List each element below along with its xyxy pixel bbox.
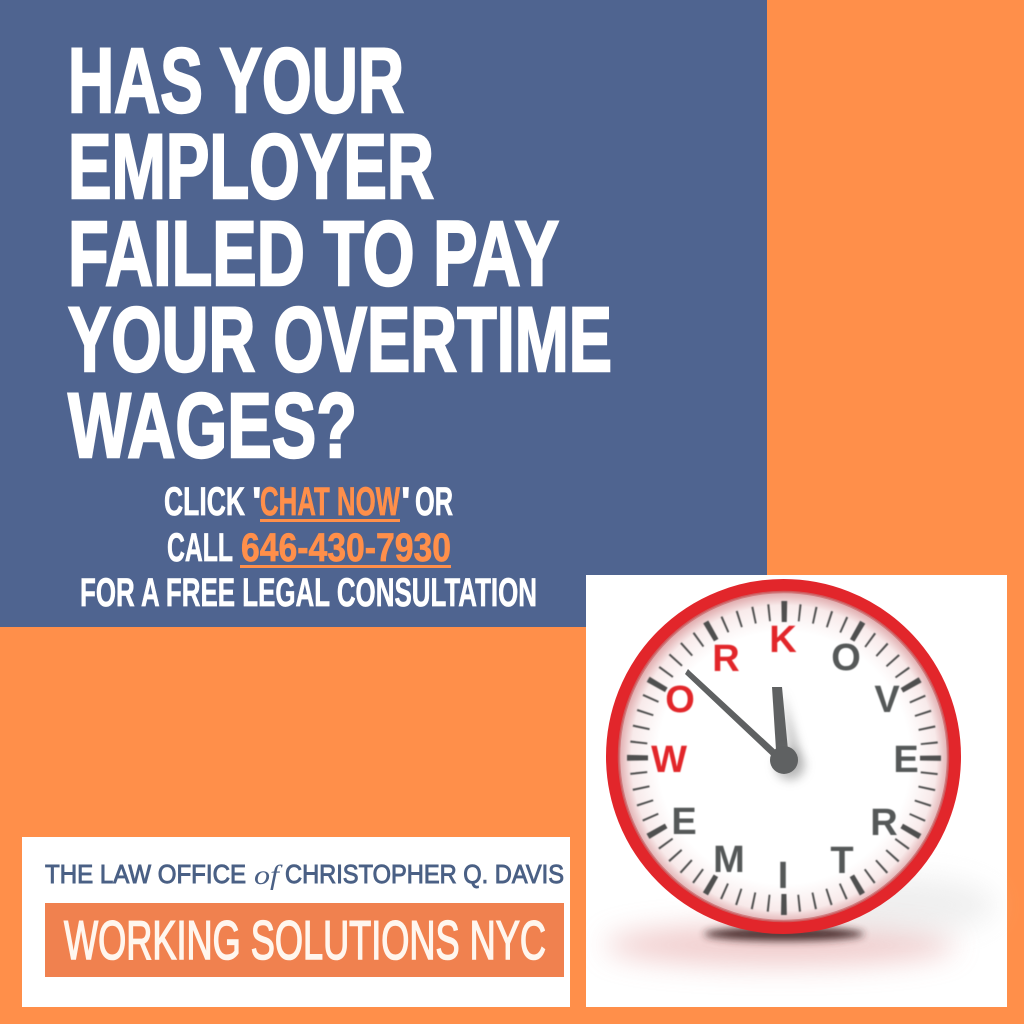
clock floor shadow xyxy=(605,877,995,965)
title: HAS YOUR xyxy=(68,30,404,132)
panel: clock image xyxy=(586,575,1007,1007)
call to action text: CHAT NOW xyxy=(260,480,400,524)
firm name: CHRISTOPHER Q. DAVIS xyxy=(285,861,564,889)
clock letters: work overtime: M xyxy=(713,839,745,881)
panel: law office logo xyxy=(22,837,570,1007)
clock letters: work overtime: R xyxy=(870,802,898,844)
clock tick marks xyxy=(638,612,930,904)
clock letters: work overtime: I xyxy=(778,855,788,897)
call to action text: CLICK xyxy=(164,480,245,524)
clock letters: work overtime: R xyxy=(712,638,740,680)
clock letters: work overtime: E xyxy=(671,801,697,843)
clock rim xyxy=(612,586,954,928)
orange banner xyxy=(45,903,564,977)
firm name: THE LAW OFFICE xyxy=(45,861,246,889)
title: EMPLOYER xyxy=(68,116,434,218)
title: YOUR OVERTIME xyxy=(68,289,612,391)
clock letters: work overtime: K xyxy=(769,619,797,661)
call to action text: OR xyxy=(415,480,453,524)
clock hands xyxy=(685,669,805,780)
clock letters: work overtime: T xyxy=(830,840,854,882)
call to action text: ' xyxy=(401,480,411,524)
clock letters: work overtime: O xyxy=(831,637,861,679)
call to action text: FOR A FREE LEGAL CONSULTATION xyxy=(80,571,537,615)
call to action text: CALL xyxy=(167,526,233,570)
title xyxy=(68,30,612,477)
firm name xyxy=(45,860,564,890)
call to action text: ' xyxy=(252,480,262,524)
title: WAGES? xyxy=(68,375,357,477)
call to action text xyxy=(80,480,537,615)
clock letters: work overtime: V xyxy=(874,679,900,721)
clock letters: work overtime: E xyxy=(893,739,919,781)
panel: blue headline block xyxy=(0,0,767,627)
title: FAILED TO PAY xyxy=(68,203,559,305)
orange banner: WORKING SOLUTIONS NYC xyxy=(64,909,546,971)
clock letters: work overtime: O xyxy=(665,679,695,721)
firm name: of xyxy=(254,860,283,890)
call to action text: 646-430-7930 xyxy=(241,526,451,570)
clock letters: work overtime xyxy=(651,619,919,897)
clock letters: work overtime: W xyxy=(651,739,687,781)
